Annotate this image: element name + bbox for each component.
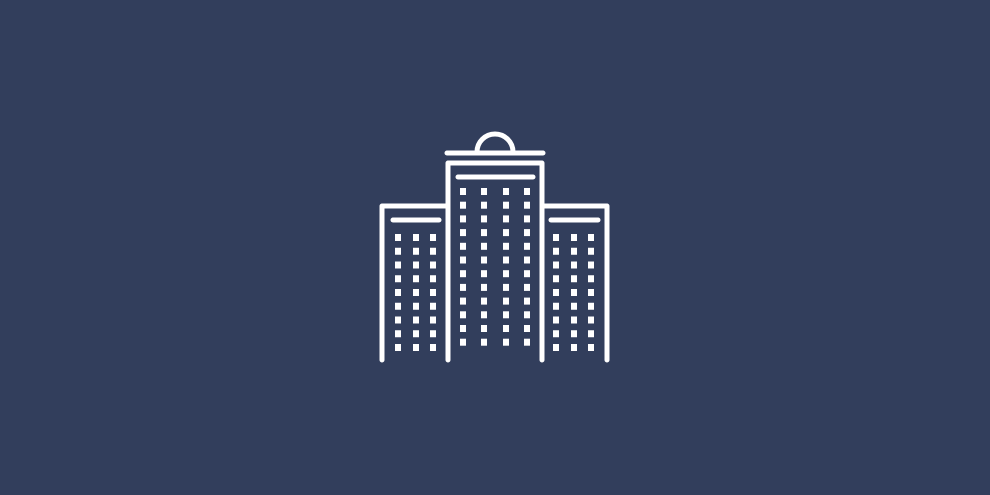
windows — [395, 188, 594, 351]
center building — [447, 134, 543, 360]
left building — [382, 206, 446, 360]
right building — [544, 206, 607, 360]
